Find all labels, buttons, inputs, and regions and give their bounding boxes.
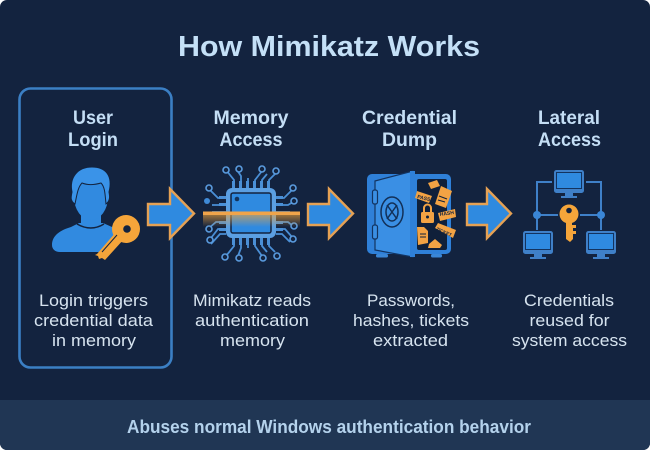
heading: memory access bbox=[214, 110, 288, 146]
icon: open safe with credentials: PASS bbox=[417, 194, 431, 203]
text: user login description bbox=[34, 291, 154, 350]
icon: networked computers with key bbox=[523, 170, 616, 259]
icon: open safe with credentials bbox=[367, 171, 456, 258]
heading: lateral access: Lateral bbox=[538, 107, 600, 129]
icon: user with key bbox=[52, 167, 140, 260]
arrow: memory to credential dump bbox=[308, 189, 353, 238]
text: credential dump description: Passwords, bbox=[367, 291, 455, 310]
heading: memory access: Access bbox=[220, 129, 283, 151]
arrow: credential dump to lateral access bbox=[467, 189, 511, 238]
heading: user login: User bbox=[73, 107, 113, 129]
text: memory access description: authentication bbox=[195, 311, 309, 330]
text: credential dump description bbox=[354, 294, 468, 346]
icon: memory chip bbox=[203, 166, 300, 261]
text: credential dump description: extracted bbox=[373, 331, 448, 350]
icon: open safe with credentials: TICKET bbox=[436, 226, 453, 238]
text: user login description: Login triggers bbox=[39, 291, 148, 310]
text: lateral access description: system access bbox=[512, 331, 627, 350]
panel: user login highlight bbox=[20, 88, 172, 368]
text: lateral access description: Credentials bbox=[524, 291, 614, 310]
heading: user login: Login bbox=[68, 129, 118, 151]
heading: lateral access bbox=[538, 110, 600, 146]
text: user login description: in memory bbox=[52, 331, 137, 350]
text: memory access description bbox=[193, 291, 311, 350]
title: How Mimikatz Works bbox=[178, 31, 480, 63]
footer band bbox=[0, 400, 650, 450]
footer text: Abuses normal Windows authentication behavior bbox=[127, 417, 531, 437]
arrow: login to memory bbox=[148, 189, 194, 238]
text: memory access description: memory bbox=[220, 331, 286, 350]
heading: lateral access: Access bbox=[538, 129, 601, 151]
text: lateral access description: reused for bbox=[530, 311, 610, 330]
heading: memory access: Memory bbox=[214, 107, 289, 129]
heading: credential dump: Dump bbox=[382, 129, 437, 151]
text: memory access description: Mimikatz reads bbox=[193, 291, 311, 310]
heading: user login bbox=[69, 110, 117, 150]
icon: open safe with credentials: HASH bbox=[439, 210, 455, 218]
heading: credential dump bbox=[362, 110, 456, 150]
heading: credential dump: Credential bbox=[362, 107, 457, 129]
text: credential dump description: hashes, tickets bbox=[353, 311, 469, 330]
text: user login description: credential data bbox=[34, 311, 154, 330]
text: lateral access description bbox=[512, 291, 627, 350]
